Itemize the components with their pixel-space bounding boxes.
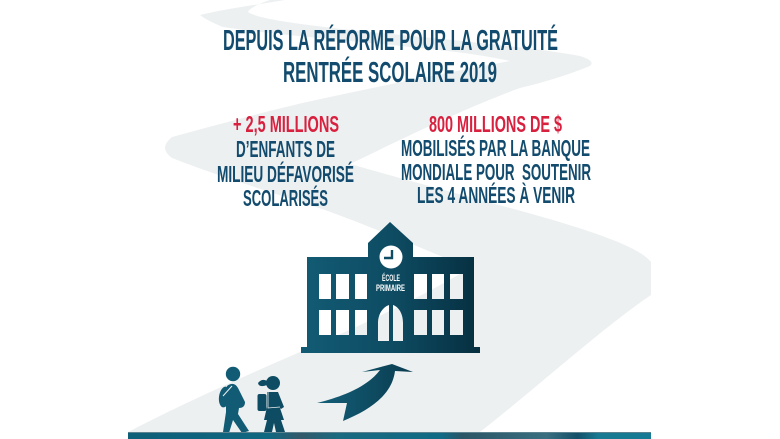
title: [223, 23, 558, 89]
icon: clock: [380, 246, 402, 268]
text block: children enrolled: SCOLARISÉS: [243, 184, 328, 211]
text block: world bank funding: [401, 111, 591, 208]
text block: children enrolled: + 2,5 MILLIONS: [233, 111, 339, 137]
text block: children enrolled: [217, 111, 354, 211]
text block: children enrolled: MILIEU DÉFAVORISÉ: [217, 160, 354, 187]
text block: world bank funding: 800 MILLIONS DE $: [429, 111, 562, 137]
school sign: ÉCOLE: [382, 273, 400, 283]
school sign: PRIMAIRE: [376, 283, 405, 293]
ground bar: [128, 432, 651, 439]
school sign: [376, 273, 405, 293]
text block: world bank funding: MOBILISÉS PAR LA BANQUE: [401, 134, 590, 161]
winding road background: [128, 0, 651, 432]
text block: world bank funding: LES 4 ANNÉES À VENIR: [417, 181, 575, 208]
icon: walking girl: [258, 376, 285, 432]
arrow: [317, 364, 413, 421]
text block: world bank funding: MONDIALE POUR SOUTENIR: [401, 159, 591, 185]
icon: walking boy: [218, 367, 249, 433]
icon: primary school building: [301, 222, 480, 353]
title: RENTRÉE SCOLAIRE 2019: [283, 55, 497, 89]
text block: children enrolled: D’ENFANTS DE: [236, 136, 335, 162]
